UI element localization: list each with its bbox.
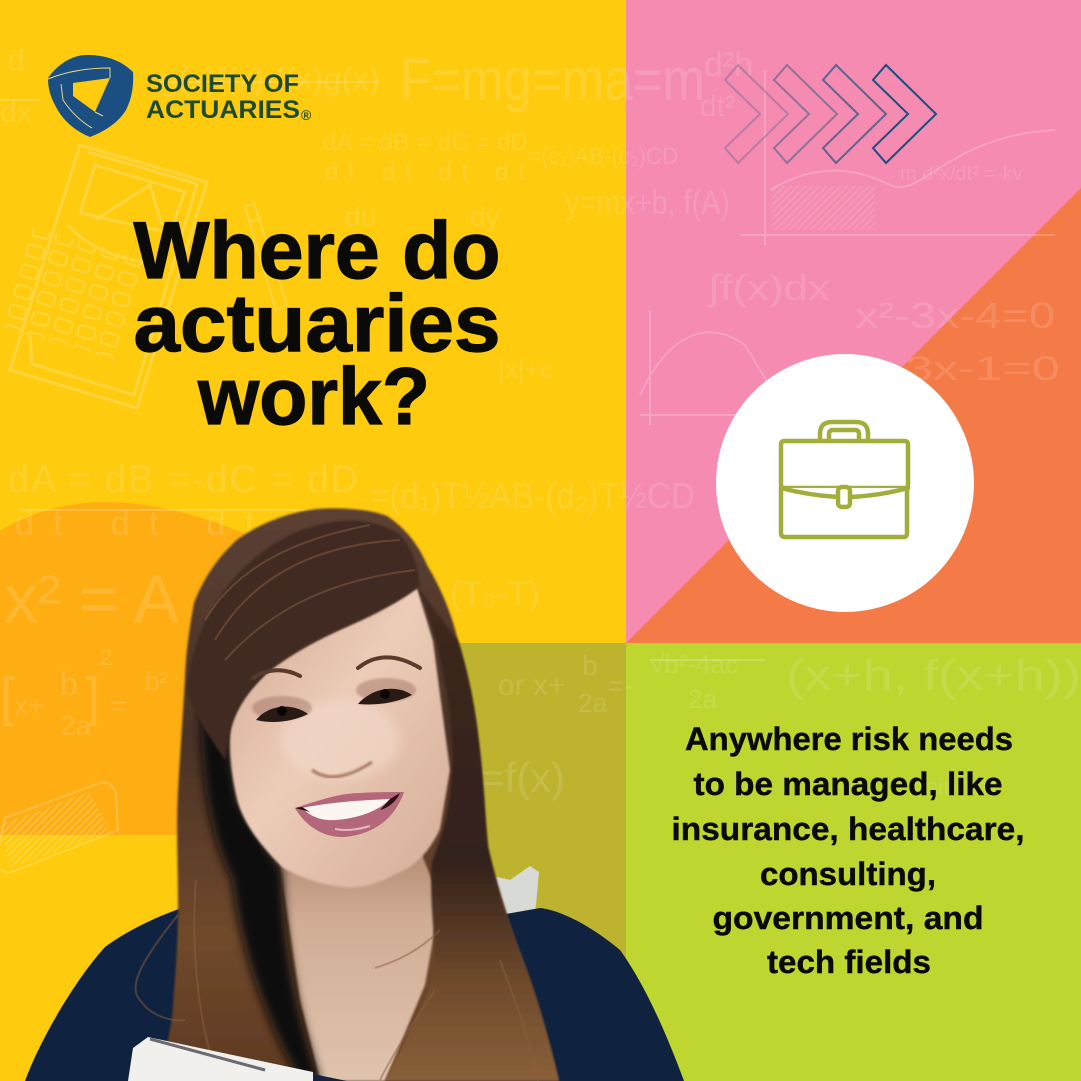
right hair strands [385,586,559,1081]
panel: orange rounded shape [0,502,260,835]
photo: smiling student holding book [25,508,684,1081]
logo wordmark: ACTUARIES [146,96,300,124]
body text: consulting, [760,856,936,892]
background math formulas: dA = dB = dC = dD [323,129,528,156]
hair mass [160,508,559,1081]
icon: calculator outline [3,145,207,408]
background math formulas: =- [608,670,634,701]
title: Where do [134,206,500,296]
panel: orange triangle [626,188,1081,643]
dark shadow beside face [201,660,320,1081]
panel: green quadrant [626,643,1081,1081]
background math formulas: F=mg=ma=m [400,46,705,113]
background math formulas: √b²-4ac [650,649,738,679]
neck and chest [278,850,440,1081]
background math formulas: 2a [578,688,607,718]
title: actuaries [134,279,500,369]
background math formulas: dx [0,96,32,129]
background math formulas: d [8,44,25,77]
body text: tech fields [767,944,931,980]
background math formulas: b [582,650,598,681]
background math formulas: dt dt dt dt [15,505,351,543]
title [134,206,500,442]
navy sweater [25,908,684,1081]
body text: Anywhere risk needs [685,721,1013,757]
background math formulas: [ [0,667,15,727]
background math formulas: x+ [14,690,44,721]
background math formulas: =f(x) [480,754,565,801]
logo wordmark [146,70,312,124]
icon: logo shield [48,55,133,137]
book [128,1037,347,1081]
logo wordmark: SOCIETY OF [146,70,299,98]
background math formulas: d²h [704,46,753,84]
background math formulas: x² = A [4,561,180,637]
background math formulas: b² [145,666,168,696]
panel: yellow background [0,0,626,1081]
mouth [295,792,404,837]
background math formulas: (x+h, f(x+h)) [786,651,1081,700]
hair highlights [135,525,538,1081]
background math formulas: = [110,690,126,721]
logo: Society of Actuaries [48,55,312,137]
background math formulas: or x+ [498,669,566,702]
body text: to be managed, like [694,766,1002,802]
body text [672,721,1024,980]
background math formulas: 2a [60,710,92,741]
forehead light [280,700,400,780]
background math formulas: |x|+c [498,354,553,384]
background math formulas: m d²x/dt² =-kv [900,163,1023,185]
background math formulas: 2 [100,645,112,670]
right eye [356,678,416,705]
background math formulas: y=mx+b, f(A) [565,184,730,222]
title: work? [197,352,430,442]
background math formulas: dy [470,201,500,232]
background math formulas: 2a [688,684,717,714]
face [230,588,450,887]
panel: pink quadrant [626,0,1081,643]
left eye [252,696,312,722]
background math formulas: dt dt dt dt [325,159,525,186]
background math formulas: dA = dB =-dC = dD [8,459,358,501]
background math formulas: =(c₁)AB-(c₂)CD [528,143,678,170]
panel: olive block [440,643,626,973]
background math formulas: Asin(wt) [910,774,997,801]
background math formulas: g(x)f(x)-f(x)g(x) [160,61,380,97]
icon: briefcase [781,422,908,537]
chevron arrows [725,65,936,163]
background math formulas: =(d₁)T½AB-(d₂)T½CD [370,475,695,516]
background math formulas: 3x-1=0 [905,350,1060,388]
nose shadow [312,762,372,777]
background math formulas: du [345,201,376,232]
eyebrows [253,657,420,678]
background math formulas: (T₀-T) [450,575,540,613]
background math formulas: x²-3x-4=0 [855,295,1055,336]
logo wordmark: ® [301,107,312,123]
white collar detail [488,866,539,955]
body text: insurance, healthcare, [672,811,1024,847]
background math formulas: ∫f(x)dx [706,267,830,308]
background math formulas: dt² [700,90,735,123]
background math formulas [0,44,1081,872]
icon: white circle with briefcase [716,354,974,612]
background math formulas: ] [85,667,100,727]
fringe strands [187,521,420,760]
background math formulas: b [60,666,78,702]
body text: government, and [712,900,984,936]
